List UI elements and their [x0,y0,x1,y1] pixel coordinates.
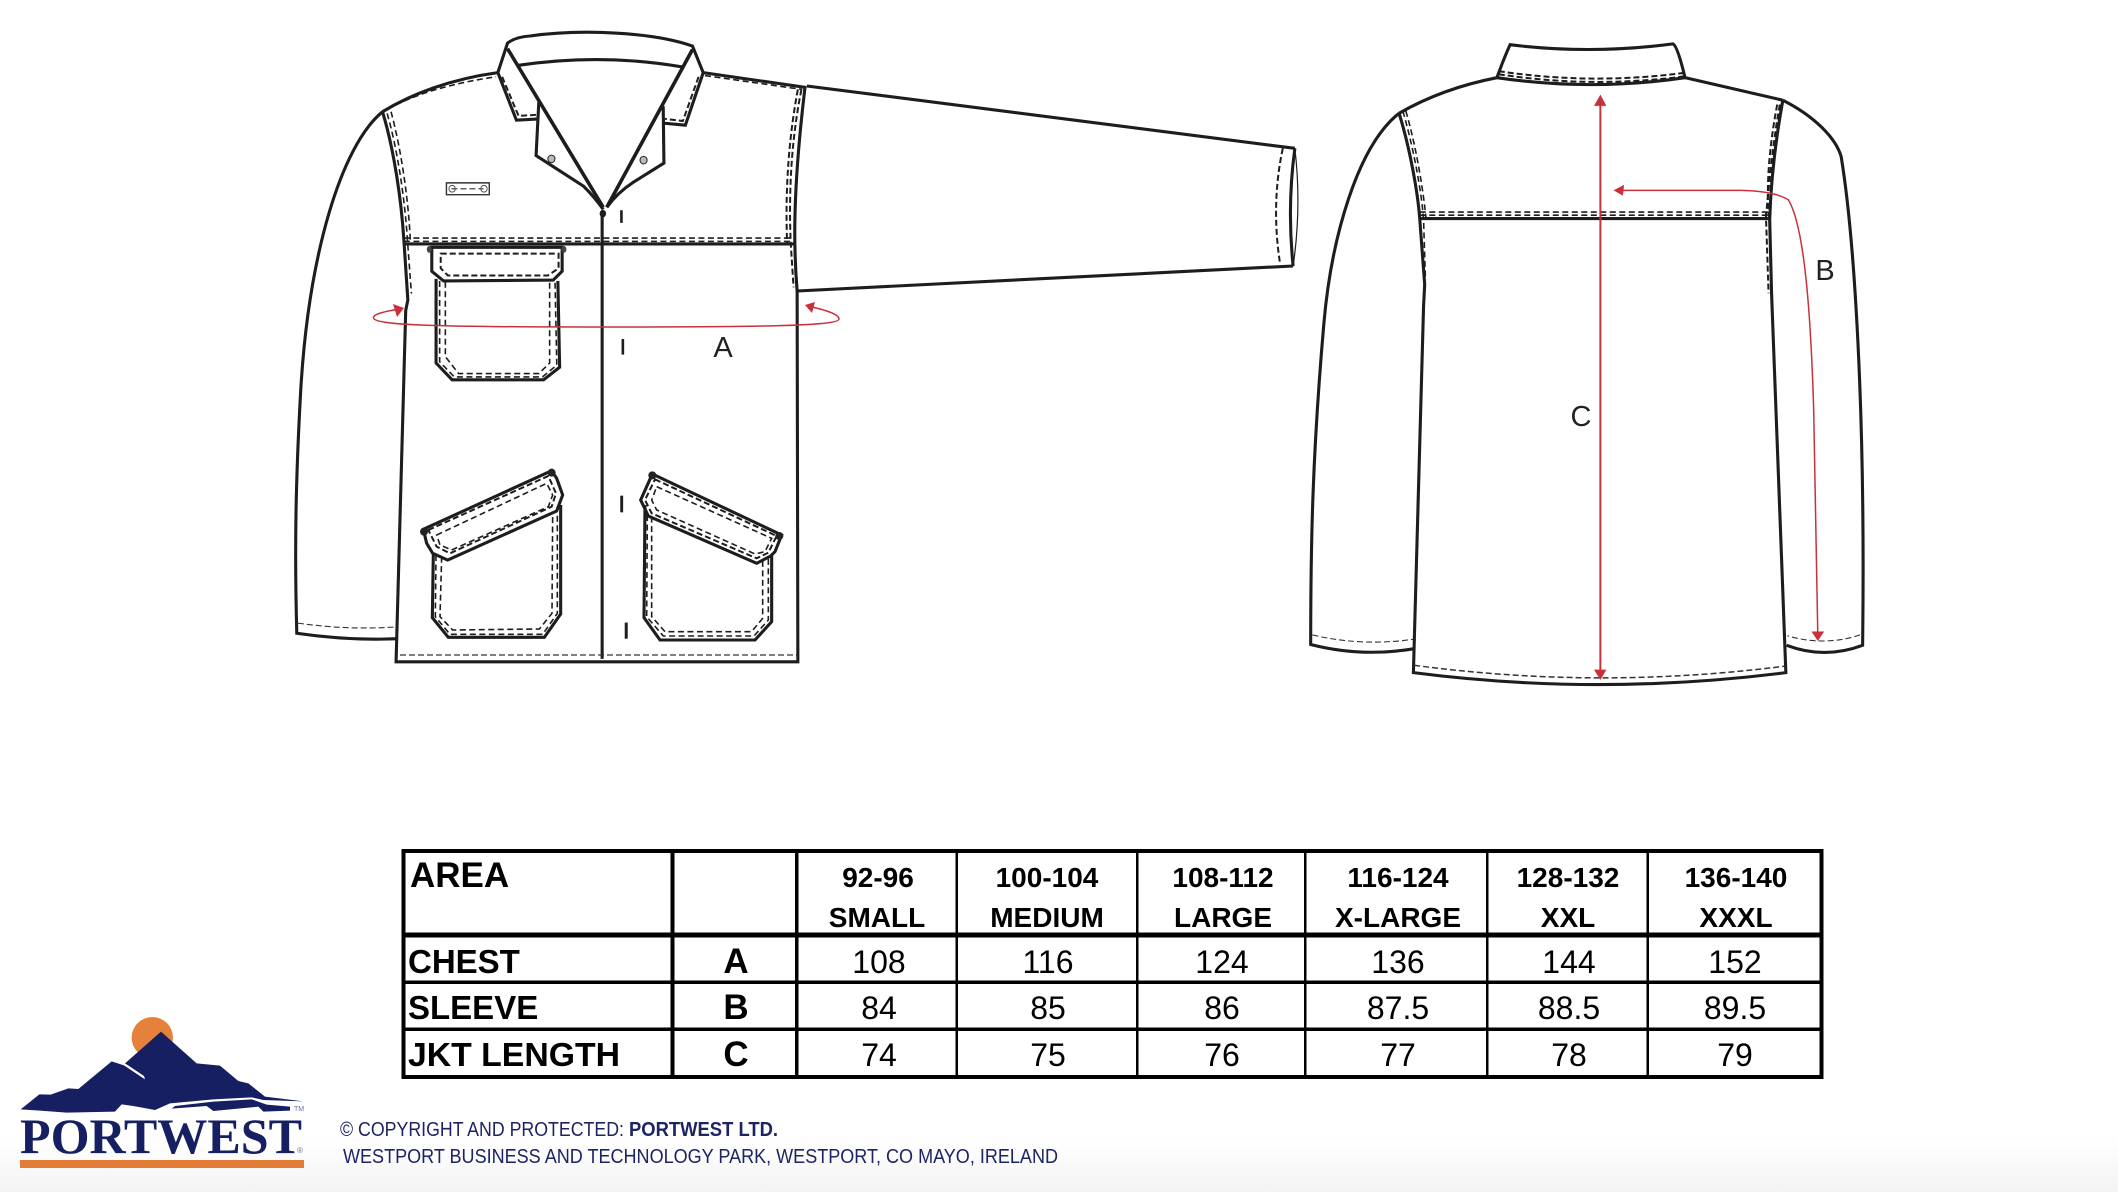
header row: 116-124 [1347,862,1449,893]
row: chest: 116 [1022,944,1074,980]
header row: 128-132 [1517,862,1619,893]
back view of jacket [1311,44,1863,685]
row: chest: 152 [1708,944,1762,980]
row: sleeve: 85 [1030,990,1066,1026]
row: jacket length [408,1035,1753,1074]
header row: MEDIUM [990,902,1104,933]
header row [410,856,1787,933]
address line: WESTPORT BUSINESS AND TECHNOLOGY PARK, WESTPORT, CO MAYO, IRELAND [343,1146,1058,1168]
label B: B [1815,255,1835,287]
table grid [402,850,1822,1077]
row: chest: 124 [1195,944,1249,980]
row: sleeve [408,988,1766,1027]
trademark symbols [294,1106,304,1155]
wordmark: PORTWEST [20,1108,302,1164]
front lower pockets [400,469,797,655]
outstretched right sleeve [797,86,1298,291]
measurement arrow A: chest [373,302,839,327]
header row: 108-112 [1172,862,1274,893]
row: jacket length: JKT LENGTH [408,1036,620,1073]
Portwest logo [20,1017,304,1168]
orange bar [20,1160,304,1168]
measurement arrow B: sleeve [1614,185,1824,641]
header row: XXXL [1699,902,1773,933]
row: sleeve: 87.5 [1367,990,1429,1026]
header row: LARGE [1174,902,1272,933]
trademark symbols: ® [297,1146,303,1155]
row: sleeve: B [723,988,749,1027]
row: chest: A [723,942,749,981]
row: sleeve: SLEEVE [408,989,538,1026]
copyright line: PORTWEST LTD. [629,1119,778,1141]
row: jacket length: 78 [1551,1037,1587,1073]
header row: 136-140 [1685,862,1787,893]
row: jacket length: 79 [1717,1037,1753,1073]
header row: 92-96 [842,862,914,893]
row: sleeve: 88.5 [1538,990,1600,1026]
row: chest: 144 [1542,944,1596,980]
row: jacket length: 75 [1030,1037,1066,1073]
header row: 100-104 [996,862,1099,893]
trademark symbols: TM [294,1106,304,1113]
label C: C [1571,401,1591,433]
header row: SMALL [829,902,925,933]
header row: AREA [410,856,509,895]
measurement arrow C: jacket length [1594,95,1606,680]
row: chest: 108 [852,944,906,980]
row: sleeve: 86 [1204,990,1240,1026]
label A: A [713,332,733,364]
front view of jacket [296,32,1298,662]
row: jacket length: C [723,1035,749,1074]
row: sleeve: 84 [861,990,897,1026]
row: chest: 136 [1371,944,1425,980]
icon: mountain and sun [21,1017,303,1113]
row: jacket length: 77 [1380,1037,1416,1073]
row: jacket length: 74 [861,1037,897,1073]
header row: X-LARGE [1335,902,1461,933]
header row: XXL [1541,902,1595,933]
size chart table [402,850,1822,1077]
front sleeve, body and collar outlines [296,32,805,662]
row: chest: CHEST [408,943,520,980]
row: jacket length: 76 [1204,1037,1240,1073]
copyright line: © COPYRIGHT AND PROTECTED: [340,1119,624,1141]
row: sleeve: 89.5 [1704,990,1766,1026]
row: chest [408,942,1762,981]
